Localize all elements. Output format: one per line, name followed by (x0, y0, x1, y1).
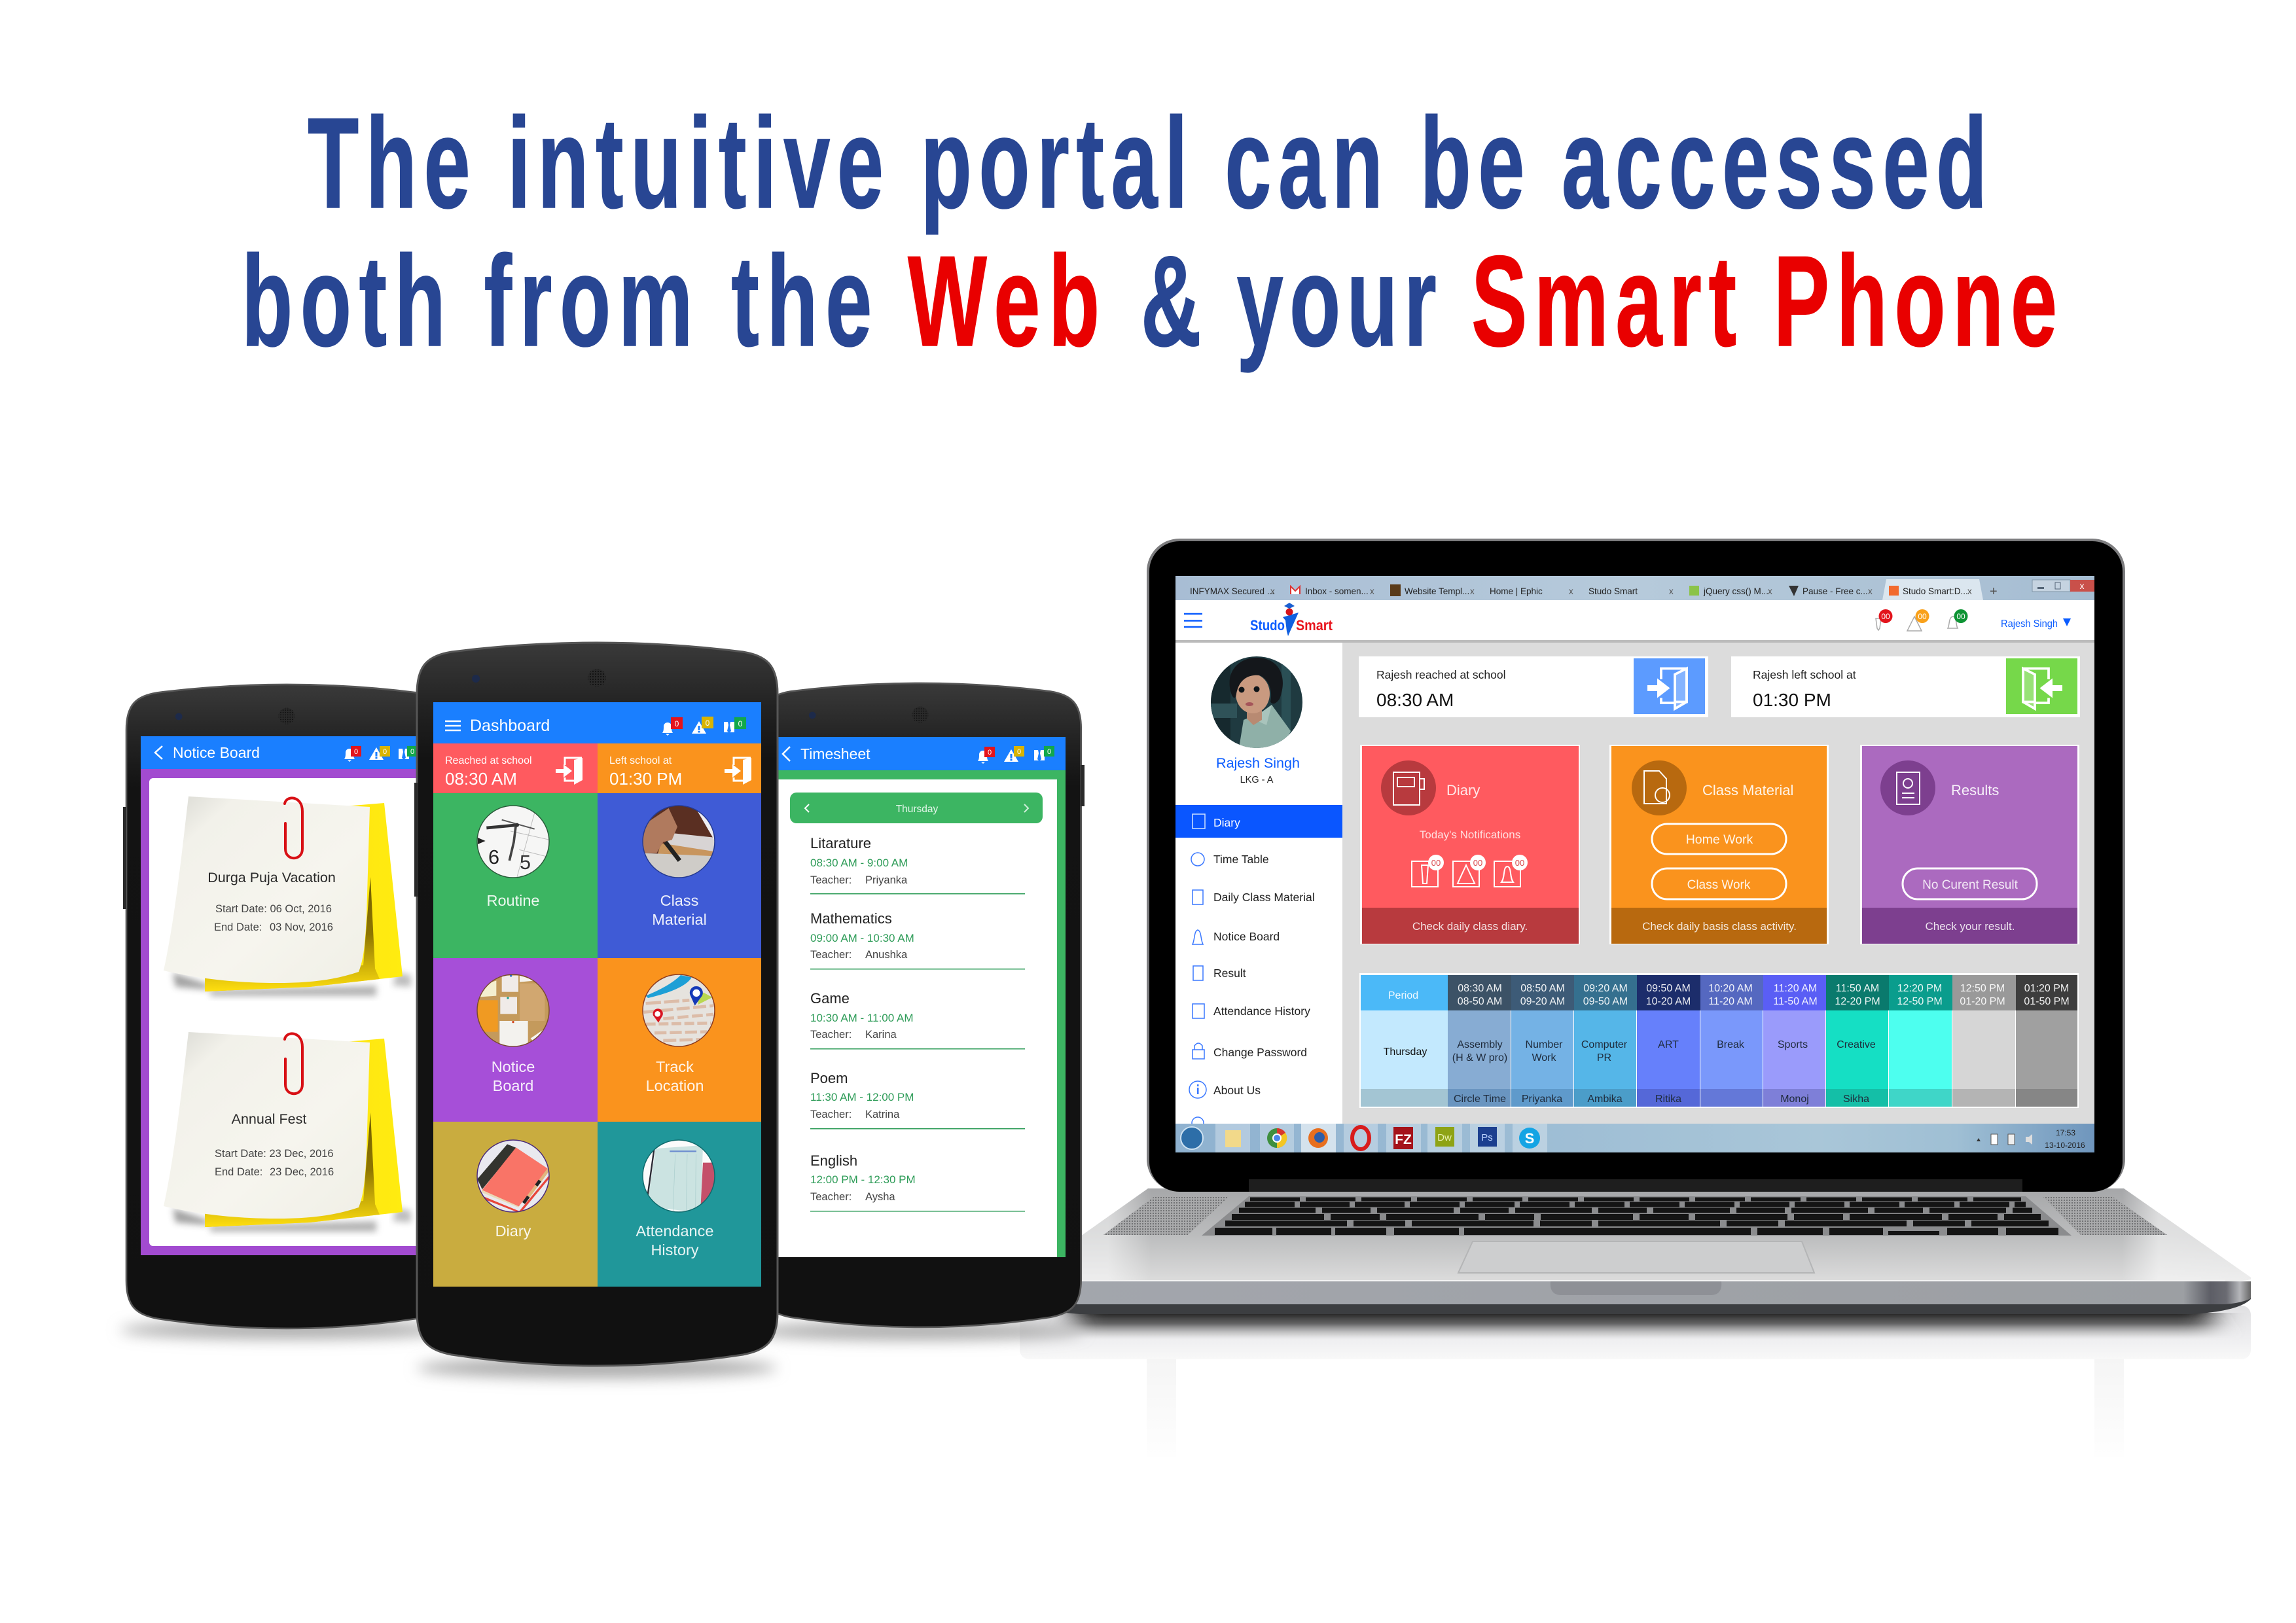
browser tabs: Studo Smart (1588, 586, 1638, 596)
sidebar menu items: Notice Board (1213, 930, 1280, 943)
tile: Attendance History: History (651, 1241, 699, 1258)
laptop base (1022, 1188, 2251, 1314)
entry: Poem: Poem (810, 1070, 848, 1086)
tile: Diary: Diary (495, 1222, 531, 1240)
attendance card: left: 01:30 PM (1753, 690, 1831, 710)
browser tabs: + (1990, 584, 1998, 599)
keyboard (1202, 1196, 2072, 1236)
app header: 0 (738, 719, 743, 728)
title line 2: both from the: both from the (242, 230, 872, 374)
left phone shadow (120, 1321, 454, 1339)
browser tabs: Pause - Free c... (1803, 586, 1868, 596)
entry: Game: Teacher: (810, 1029, 852, 1041)
windows taskbar: 13-10-2016 (2045, 1141, 2085, 1150)
logo (1250, 603, 1333, 636)
sidebar (1175, 643, 1342, 1129)
class material card: Check daily basis class activity. (1642, 920, 1797, 933)
tile: Notice Board (433, 958, 598, 1122)
timetable header row: 09:50 AM (1646, 983, 1691, 994)
button: Home Work: Home Work (1686, 832, 1753, 847)
entry: Litarature: Litarature (810, 835, 871, 851)
white content panel (776, 779, 1057, 1257)
windows taskbar: Dw (1437, 1132, 1452, 1143)
entry: Game (810, 990, 1025, 1050)
title highlight: Smart Phone: Smart Phone (1471, 230, 2057, 374)
diary card (1360, 745, 1580, 944)
results card: Results (1951, 782, 1999, 798)
sticky note: Annual Fest: End Date: (215, 1166, 262, 1178)
sticky note: Durga Puja Vacation: End Date: (214, 921, 262, 933)
results card: Check your result. (1926, 920, 2015, 933)
timetable teacher row: Monoj (1780, 1094, 1809, 1105)
status: left school: Left school at (609, 755, 672, 766)
day selector (790, 793, 1043, 823)
entry: Litarature: Priyanka (865, 874, 908, 886)
timetable Thursday row: Computer (1581, 1039, 1628, 1050)
sidebar menu items: Change Password (1213, 1046, 1307, 1059)
browser tabs: x (1669, 586, 1674, 596)
app header: 0 (1017, 748, 1021, 756)
browser tabs: x (1569, 586, 1573, 596)
notification icons: 00 (1918, 612, 1927, 621)
center phone shadow (417, 1357, 777, 1378)
button: No Curent Result (1903, 868, 2037, 899)
windows taskbar (1175, 1124, 2094, 1152)
user menu: Rajesh Singh (2001, 618, 2058, 630)
app header: Timesheet (800, 745, 870, 762)
timetable Thursday row: Thursday (1384, 1046, 1427, 1058)
laptop lid (1147, 539, 2125, 1192)
status: reached at school: Reached at school (445, 755, 532, 766)
app header: 0 (1047, 748, 1051, 756)
tile: Attendance History: Attendance (636, 1222, 713, 1240)
logo: Smart (1296, 617, 1333, 633)
button: Home Work (1652, 824, 1786, 854)
browser tabs: Home | Ephic (1490, 586, 1543, 596)
tile: Notice Board: Notice (492, 1058, 535, 1075)
sticky note: Annual Fest: Annual Fest (232, 1111, 306, 1127)
logo: Studo (1250, 617, 1285, 633)
entry: Poem: Katrina (865, 1109, 900, 1120)
timetable header row: 12-20 PM (1835, 996, 1880, 1007)
entry: Poem: 11:30 AM - 12:00 PM (810, 1091, 914, 1103)
timetable header row: 09-20 AM (1520, 996, 1565, 1007)
sticky note: Annual Fest: Start Date: 23 Dec, 2016 (215, 1148, 334, 1160)
browser tabs: Studo Smart:D... (1903, 586, 1968, 596)
button: Class Work: Class Work (1687, 878, 1751, 892)
speaker grille left (1103, 1196, 1229, 1235)
laptop (1020, 539, 2251, 1457)
notification icons (1412, 855, 1528, 887)
sticky note: Durga Puja Vacation (164, 796, 411, 996)
tile: Track Location: Track (656, 1058, 694, 1075)
status: left school (598, 743, 761, 793)
browser tabs: x (1768, 586, 1772, 596)
app header: 0 (988, 749, 992, 757)
entry: English: Aysha (865, 1191, 895, 1203)
entry: English: 12:00 PM - 12:30 PM (810, 1173, 916, 1186)
student class: LKG - A (1240, 775, 1274, 785)
entry: English: Teacher: (810, 1191, 852, 1203)
timetable Thursday row: Creative (1837, 1039, 1876, 1050)
sidebar menu items: Result (1213, 967, 1246, 980)
timetable header row: 01-50 PM (2024, 996, 2070, 1007)
timetable header row: 11-20 AM (1708, 996, 1753, 1007)
right phone: Timesheet (760, 683, 1085, 1327)
tile: Notice Board: Board (493, 1077, 533, 1094)
timetable teacher row (1361, 1089, 2077, 1107)
browser tabs: x (2080, 580, 2084, 591)
timetable header row (1361, 975, 2077, 1010)
timetable header row: 11:20 AM (1774, 983, 1817, 994)
timetable header row: 10:20 AM (1708, 983, 1753, 994)
app header (776, 737, 1066, 770)
class material card (1609, 745, 1829, 944)
sidebar menu items: Time Table (1213, 853, 1269, 866)
diary card: Today's Notifications (1420, 829, 1520, 841)
timetable header row: 01:20 PM (2024, 983, 2069, 994)
entry: Mathematics: Anushka (865, 949, 908, 961)
app header (433, 702, 761, 743)
entry: Mathematics: 09:00 AM - 10:30 AM (810, 932, 914, 944)
attendance card: reached (1359, 656, 1708, 717)
browser tabs: INFYMAX Secured ... (1190, 586, 1274, 596)
app header: Notice Board (173, 744, 260, 761)
timetable header row: 08:50 AM (1520, 983, 1565, 994)
sidebar menu items: Attendance History (1213, 1005, 1310, 1018)
tile: Track Location: Location (646, 1077, 704, 1094)
browser tabs: jQuery css() M... (1703, 586, 1768, 596)
entry: Mathematics (810, 910, 1025, 970)
entry: Mathematics: Mathematics (810, 910, 892, 927)
notification icons: 00 (1431, 858, 1441, 868)
sticky note: Durga Puja Vacation: Start Date: 06 Oct, 2016 (215, 903, 332, 915)
timetable Thursday row: PR (1597, 1052, 1611, 1063)
title line 2: and your: & your (1141, 230, 1437, 374)
timetable Thursday row: Assembly (1457, 1039, 1503, 1050)
notch (1551, 1281, 1721, 1295)
timetable teacher row: Priyanka (1522, 1094, 1562, 1105)
status: reached at school (433, 743, 598, 793)
timetable Thursday row: (H & W pro) (1452, 1052, 1507, 1063)
app header: 0 (706, 719, 710, 728)
day selector: Thursday (896, 804, 939, 815)
button: No Curent Result: No Curent Result (1922, 878, 2018, 892)
app header: 0 (410, 748, 414, 756)
timetable Thursday row: Sports (1778, 1039, 1808, 1050)
right phone shadow (749, 1322, 1083, 1340)
timetable (1359, 973, 2079, 1108)
windows taskbar: Ps (1481, 1132, 1493, 1143)
timetable header row: 09-50 AM (1583, 996, 1628, 1007)
title line 1: The intuitive portal can be accessed (308, 92, 1987, 236)
status: left school: 01:30 PM (609, 769, 682, 789)
sticky note: Annual Fest: 23 Dec, 2016 (270, 1166, 334, 1178)
trackpad (1458, 1241, 1814, 1273)
sticky note: Durga Puja Vacation: Durga Puja Vacation (207, 870, 336, 885)
browser tabs: x (1270, 586, 1275, 596)
windows taskbar: 17:53 (2056, 1128, 2075, 1137)
center phone: Dashboard (414, 643, 778, 1366)
browser tabs: Website Templ... (1405, 586, 1469, 596)
browser tabs: x (1470, 586, 1475, 596)
timetable header row: 12-50 PM (1897, 996, 1943, 1007)
entry: Game: Karina (865, 1029, 897, 1041)
sidebar menu items (1189, 853, 1315, 1129)
entry: Mathematics: Teacher: (810, 949, 852, 961)
class material card: Class Material (1702, 782, 1793, 798)
app header: Dashboard (470, 717, 550, 735)
active menu item: Diary (1175, 805, 1342, 838)
timetable header row: 12:50 PM (1960, 983, 2005, 994)
sticky note: Durga Puja Vacation: 03 Nov, 2016 (270, 921, 333, 933)
timetable header row: 08:30 AM (1458, 983, 1502, 994)
results card (1860, 745, 2079, 944)
browser tabs (1175, 576, 2094, 600)
windows taskbar: S (1525, 1130, 1534, 1147)
laptop shadow and reflection (1020, 1306, 2251, 1457)
laptop screen (1175, 576, 2094, 1152)
timetable Thursday row: ART (1658, 1039, 1679, 1050)
notification icons (1876, 609, 1967, 631)
entry: Game: Game (810, 990, 850, 1007)
attendance card: reached: 08:30 AM (1376, 690, 1454, 710)
timetable Thursday row: Number (1526, 1039, 1563, 1050)
timetable header row: 11-50 AM (1773, 996, 1818, 1007)
timetable Thursday row (1361, 1010, 2077, 1089)
title (242, 92, 2057, 374)
timetable teacher row: Sikha (1843, 1094, 1869, 1105)
hamburger menu (1184, 614, 1202, 627)
screen background (141, 769, 433, 1255)
notification icons: 00 (1473, 858, 1482, 868)
browser tabs: x (1967, 586, 1972, 596)
tile: Attendance History (598, 1122, 761, 1287)
student avatar (1211, 656, 1302, 748)
app header (141, 736, 433, 769)
tile: Diary (433, 1122, 598, 1287)
entry: English: English (810, 1152, 857, 1169)
screen background (776, 770, 1066, 1257)
browser tabs: x (1370, 586, 1374, 596)
timetable teacher row: Ritika (1655, 1094, 1681, 1105)
timetable header row: 01-20 PM (1960, 996, 2005, 1007)
speaker grille right (2043, 1196, 2167, 1235)
timetable Thursday row: Work (1532, 1052, 1557, 1063)
notice card panel (149, 778, 431, 1246)
timetable header row: Period (1388, 990, 1418, 1001)
timetable header row: 10-20 AM (1646, 996, 1691, 1007)
tile: Routine: Routine (487, 892, 539, 909)
notification icons: 00 (1881, 612, 1890, 621)
entry: Game: 10:30 AM - 11:00 AM (810, 1012, 914, 1024)
left phone: Notice Board (123, 685, 448, 1329)
diary card: Check daily class diary. (1412, 920, 1528, 933)
entry: Litarature (810, 835, 1025, 894)
attendance card: left (1731, 656, 2080, 717)
timetable header row: 08-50 AM (1458, 996, 1502, 1007)
browser tabs: x (1868, 586, 1873, 596)
tile: Routine: 5 (520, 851, 531, 874)
entry: Litarature: Teacher: (810, 874, 852, 886)
attendance card: left: Rajesh left school at (1753, 668, 1856, 681)
button: Class Work (1652, 868, 1786, 899)
entry: Litarature: 08:30 AM - 9:00 AM (810, 857, 908, 869)
attendance card: reached: Rajesh reached at school (1376, 668, 1505, 681)
windows taskbar: FZ (1395, 1132, 1412, 1147)
entry: English (810, 1152, 1025, 1212)
portal top bar (1175, 600, 2094, 643)
tile: Class Material: Class (660, 892, 698, 909)
timetable Thursday row: Break (1717, 1039, 1745, 1050)
active menu item: Diary: Diary (1213, 816, 1240, 829)
notification icons: 00 (1515, 858, 1524, 868)
timetable teacher row: Circle Time (1454, 1094, 1506, 1105)
timetable header row: 09:20 AM (1583, 983, 1628, 994)
diary card: Diary (1446, 782, 1480, 798)
tile: Routine: 6 (488, 846, 499, 868)
app header: 0 (675, 719, 679, 728)
timetable header row: 12:20 PM (1897, 983, 1942, 994)
tile: Class Material: Material (652, 911, 707, 928)
student name: Rajesh Singh (1216, 755, 1300, 771)
tile: Class Material (598, 793, 761, 958)
timetable header row: 11:50 AM (1836, 983, 1879, 994)
entry: Poem: Teacher: (810, 1109, 852, 1120)
status: reached at school: 08:30 AM (445, 769, 517, 789)
notification icons: 00 (1956, 612, 1965, 621)
tile: Track Location (598, 958, 761, 1122)
entry: Poem (810, 1070, 1025, 1130)
title highlight: Web: Web (908, 230, 1100, 374)
app header: 0 (383, 748, 387, 756)
timetable teacher row: Ambika (1587, 1094, 1623, 1105)
sidebar menu items: Daily Class Material (1213, 891, 1315, 904)
browser tabs: Inbox - somen... (1305, 586, 1369, 596)
app header: 0 (354, 748, 358, 756)
sidebar menu items: About Us (1213, 1084, 1261, 1097)
sticky note: Annual Fest (164, 1032, 411, 1232)
tile: Routine (433, 793, 598, 958)
